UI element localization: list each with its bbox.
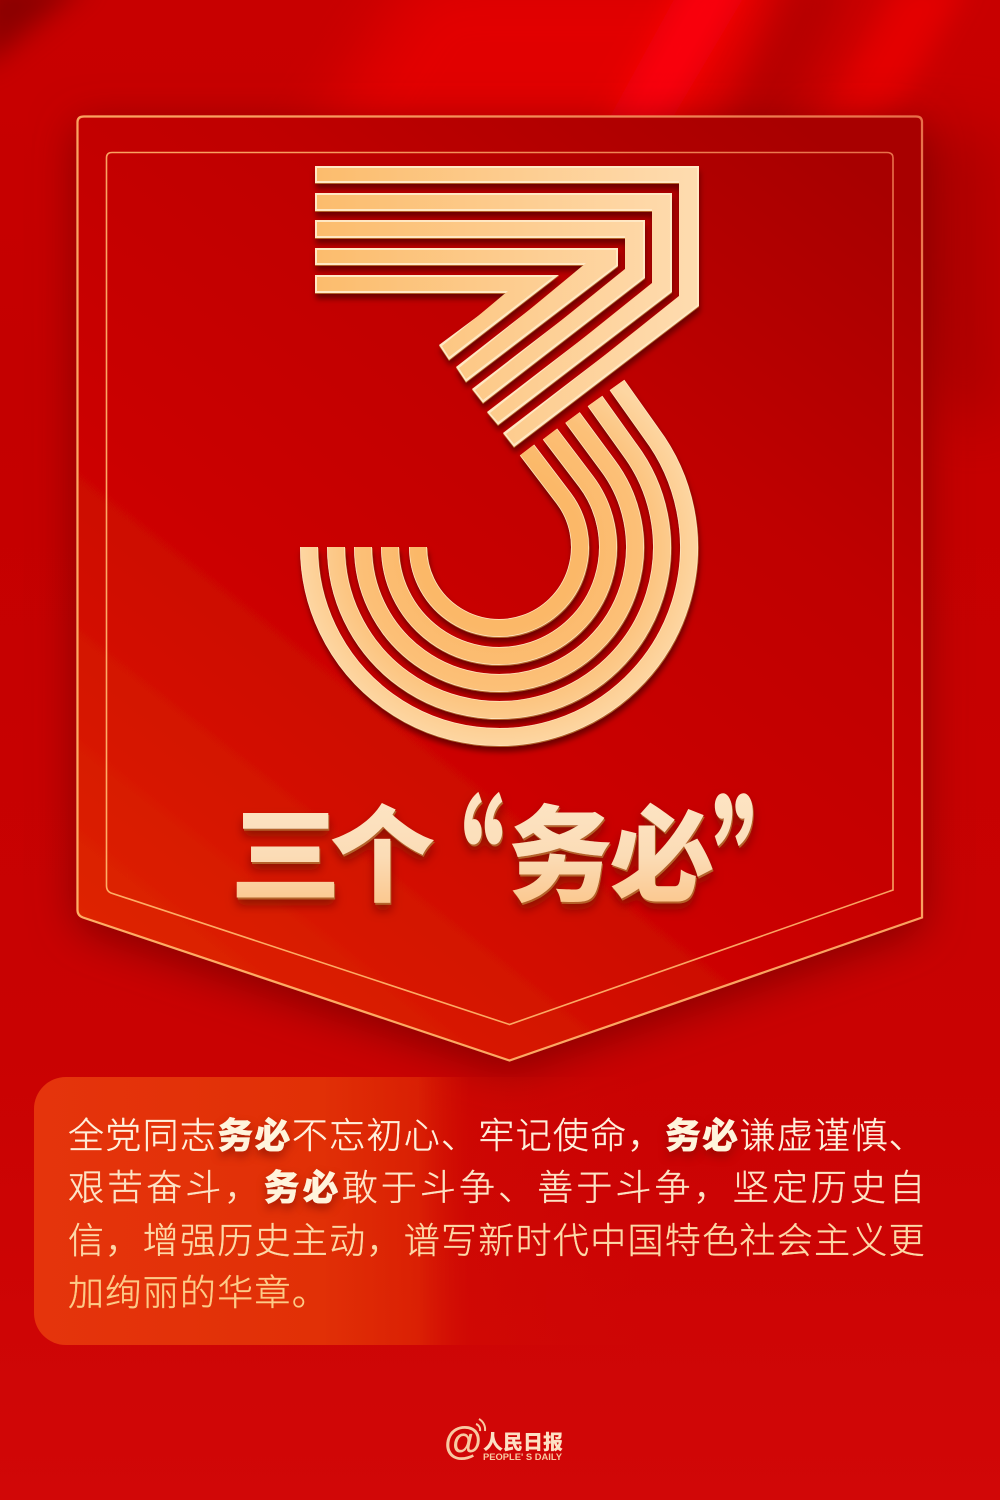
body line 4: 加绚丽的华章。 [68, 1272, 329, 1313]
title: 三 [230, 772, 341, 924]
title: ” [713, 745, 811, 979]
numeral 3 [309, 166, 699, 738]
shield panel [78, 116, 922, 1060]
arc band 1 [309, 385, 690, 738]
arc band 4 [390, 434, 609, 657]
body line 1: 全党同志务必不忘初心、牢记使命，务必谦虚谨慎、 [68, 1115, 926, 1156]
chevron band 1 [315, 166, 699, 448]
arc band 5 [418, 450, 581, 629]
chevron band 3 [315, 220, 645, 404]
logo subline: PEOPLE' S DAILY [483, 1451, 563, 1462]
arc band 3 [363, 418, 636, 684]
arc band 2 [336, 401, 663, 711]
title: “ [406, 745, 504, 979]
logo wordmark: 人民日报 [483, 1431, 563, 1454]
inner shield outline [106, 152, 893, 1024]
icon: @ mark with signal arcs: @ [444, 1420, 482, 1463]
chevron band 5 [315, 275, 559, 361]
body line 3: 信，增强历史主动，谱写新时代中国特色社会主义更 [68, 1220, 926, 1261]
body text [68, 1115, 928, 1313]
numeral 3 upper chevron bands [315, 166, 699, 448]
chevron band 4 [315, 248, 618, 383]
body line 2: 艰苦奋斗，务必敢于斗争、善于斗争，坚定历史自 [68, 1167, 928, 1208]
title [230, 745, 811, 979]
chevron band 2 [315, 193, 672, 426]
numeral 3 lower arc bands [309, 385, 690, 738]
title: 必 [610, 772, 715, 924]
title: 个 [330, 772, 435, 924]
text panel [34, 1077, 674, 1345]
logo: People's Daily [444, 1419, 563, 1463]
title: 务 [508, 772, 613, 924]
